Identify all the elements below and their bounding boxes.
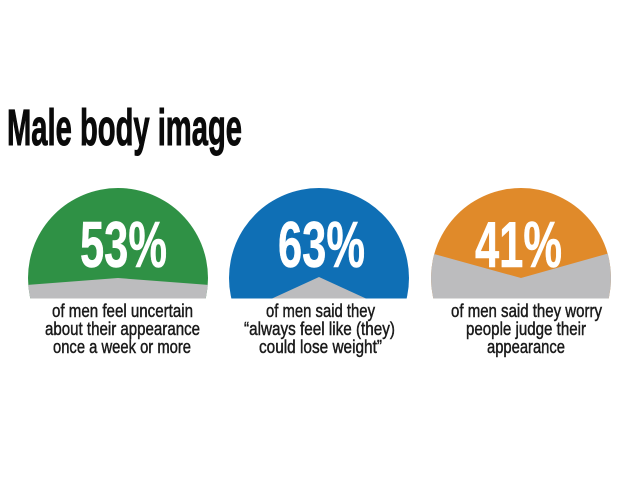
caption: of men feel uncertain [52,301,193,321]
gauge: green semicircle [28,188,208,298]
value: 41%: 41% [475,208,562,281]
caption: people judge their [466,319,586,339]
panel: 53 percent [28,188,208,354]
gauge: blue semicircle [229,188,409,298]
caption: appearance [487,337,565,357]
gauge: orange semicircle [431,188,611,298]
caption: about their appearance [45,319,200,339]
caption: once a week or more [53,337,191,357]
caption: could lose weight” [259,337,382,357]
panel: 63 percent [229,188,409,358]
title: Male body image [7,99,242,156]
value: 53%: 53% [80,208,167,281]
caption: “always feel like (they) [244,319,395,339]
caption: of men said they [266,301,375,321]
caption [45,301,200,357]
panel: 41 percent [431,188,611,358]
value: 63%: 63% [278,208,365,281]
caption [244,301,395,357]
caption: of men said they worry [451,301,602,321]
caption [451,301,602,357]
